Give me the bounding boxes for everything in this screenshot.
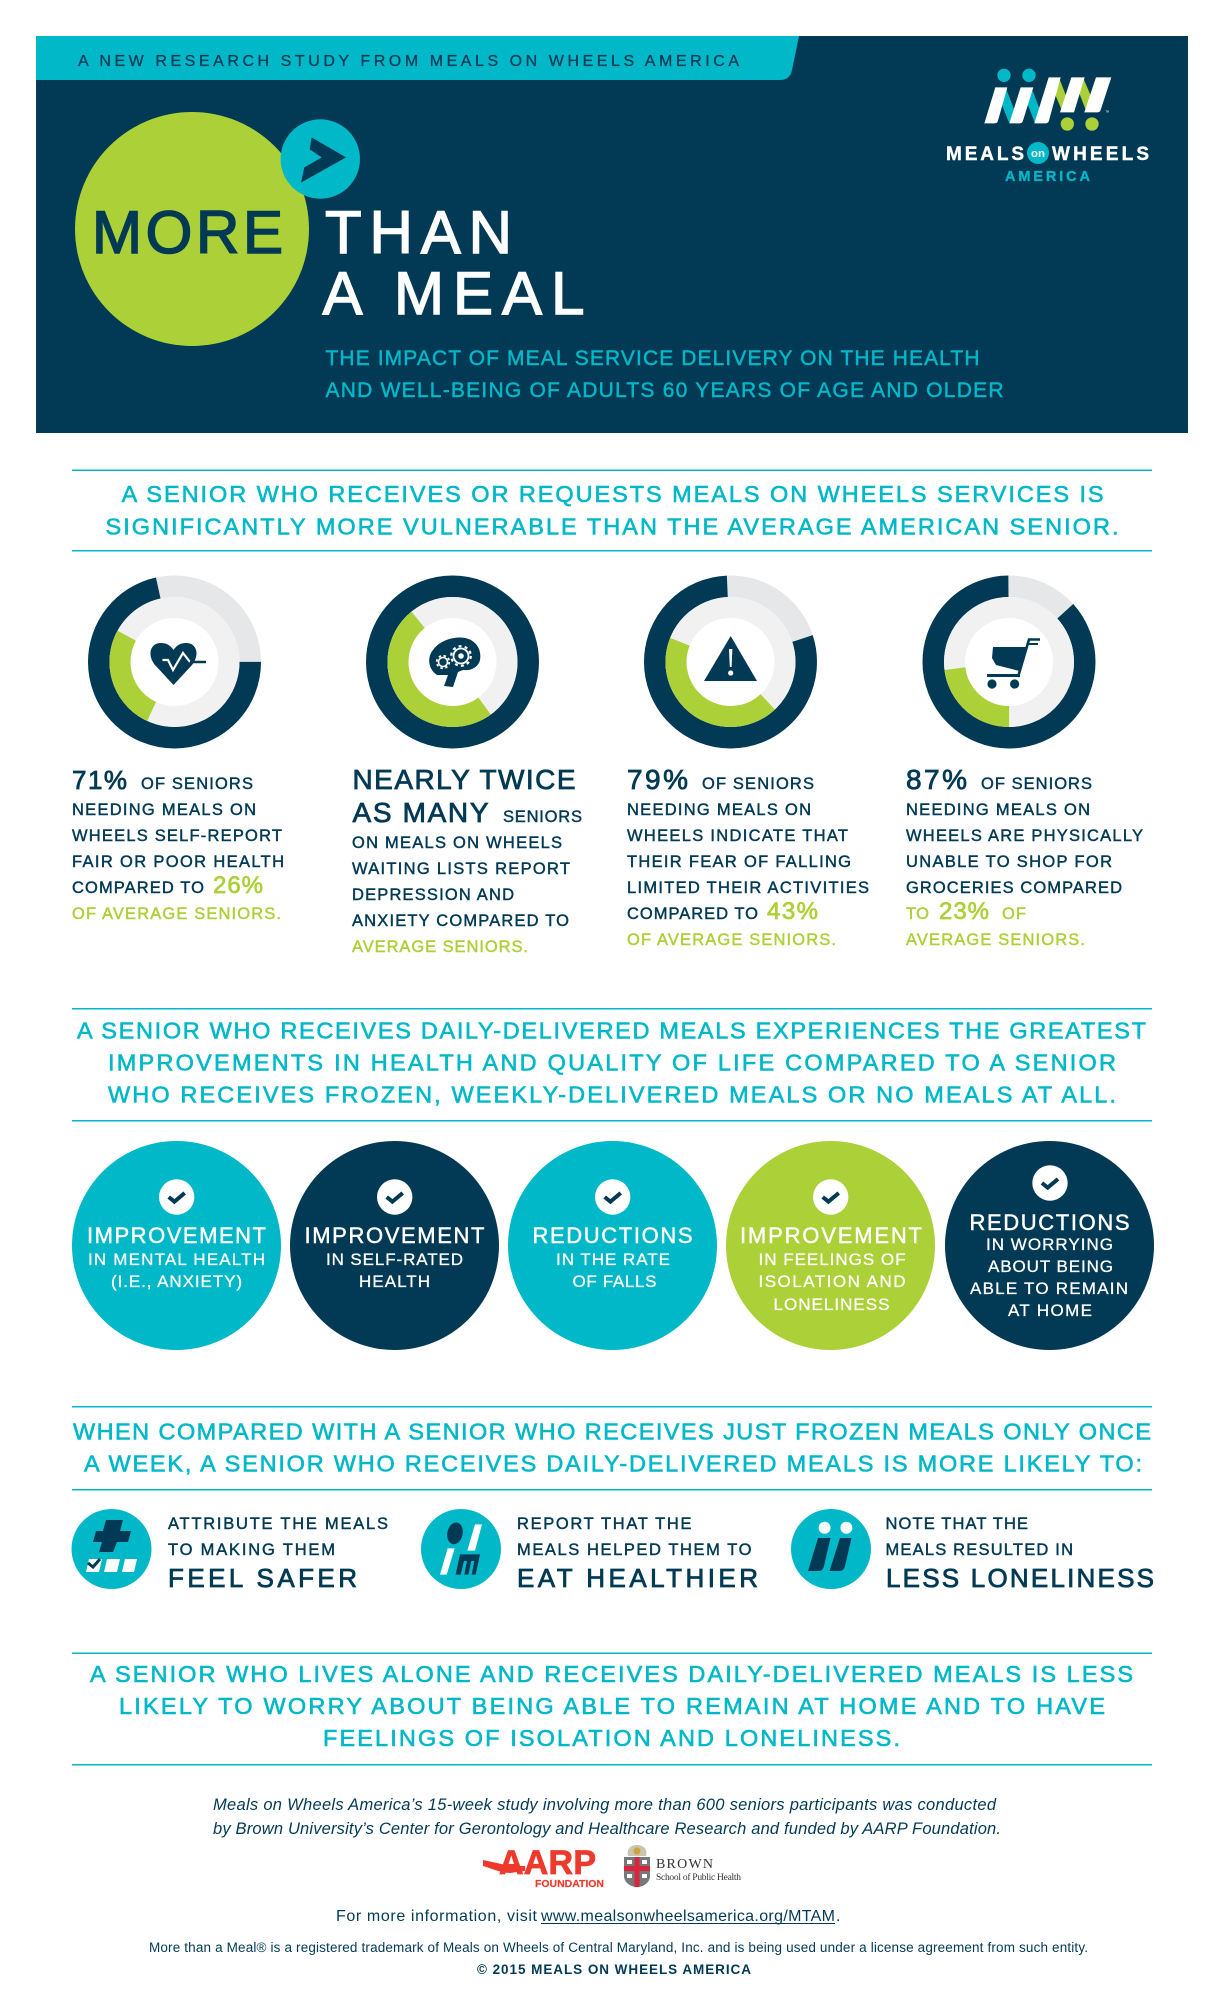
circle: improvement in feelings of isolation: ISOLATION AND bbox=[758, 1272, 906, 1291]
text: less loneliness: MEALS RESULTED IN bbox=[886, 1541, 1073, 1559]
text: 79 percent: OF AVERAGE SENIORS. bbox=[627, 931, 836, 949]
icon: teal arrow badge bbox=[281, 119, 360, 199]
text: 87 percent: UNABLE TO SHOP FOR bbox=[906, 853, 1112, 871]
text: 71 percent: NEEDING MEALS ON bbox=[72, 801, 256, 819]
text: more information: For more information, visit bbox=[336, 1908, 538, 1925]
circle: improvement in feelings of isolation: IMPROVEMENT bbox=[740, 1223, 922, 1248]
text: eat healthier bbox=[517, 1515, 758, 1593]
logo: meals on wheels america: TM bbox=[1105, 109, 1109, 113]
subtitle: AND WELL-BEING OF ADULTS 60 YEARS OF AGE AND OLDER bbox=[326, 379, 1004, 402]
text: feel safer bbox=[168, 1515, 388, 1593]
text: feel safer: FEEL SAFER bbox=[168, 1563, 357, 1593]
heading: lives alone: LIKELY TO WORRY ABOUT BEING ABLE TO REMAIN AT HOME AND TO HAVE bbox=[119, 1693, 1105, 1719]
text: nearly twice as many: DEPRESSION AND bbox=[352, 886, 514, 904]
circle: reductions in worrying: ABOUT BEING bbox=[988, 1257, 1113, 1276]
text: 71 percent: OF SENIORS bbox=[141, 775, 253, 793]
item: eat healthier bbox=[421, 1509, 758, 1593]
logo: meals on wheels america: on bbox=[1031, 148, 1045, 160]
text: feel safer: TO MAKING THEM bbox=[168, 1541, 335, 1559]
icon: medical cross and checkboxes bbox=[72, 1509, 152, 1589]
text: 87 percent: NEEDING MEALS ON bbox=[906, 801, 1090, 819]
text: 71 percent: 26% bbox=[213, 872, 263, 899]
circle: improvement in mental health bbox=[72, 1141, 281, 1350]
circle: improvement in self-rated health: IMPROVEMENT bbox=[304, 1223, 484, 1248]
icon: warning triangle bbox=[704, 636, 757, 681]
logo: AARP Foundation: FOUNDATION bbox=[535, 1878, 604, 1890]
panel: stat nearly twice bbox=[352, 586, 582, 956]
logo: meals on wheels america bbox=[946, 69, 1149, 185]
text: 79 percent: 79% bbox=[627, 764, 688, 795]
heading: compared with frozen meals: WHEN COMPARED WITH A SENIOR WHO RECEIVES JUST FROZEN MEALS ONLY ONCE bbox=[73, 1418, 1151, 1444]
text: nearly twice as many: NEARLY TWICE bbox=[352, 764, 576, 795]
heading: lives alone: FEELINGS OF ISOLATION AND LONELINESS. bbox=[323, 1725, 900, 1751]
text: nearly twice as many: AS MANY bbox=[352, 797, 489, 828]
circle: reductions in worrying bbox=[945, 1141, 1154, 1350]
circle: improvement in self-rated health: IN SELF-RATED bbox=[326, 1250, 463, 1269]
title: more than a meal: A MEAL bbox=[322, 260, 584, 327]
tab: research study ribbon bbox=[36, 36, 799, 80]
text: 79 percent: OF SENIORS bbox=[702, 775, 814, 793]
circle: reductions in worrying: REDUCTIONS bbox=[970, 1210, 1130, 1235]
heading: lives alone: A SENIOR WHO LIVES ALONE AND RECEIVES DAILY-DELIVERED MEALS IS LESS bbox=[90, 1661, 1133, 1687]
text: 87 percent: AVERAGE SENIORS. bbox=[906, 931, 1085, 949]
logo: meals on wheels america: WHEELS bbox=[1052, 144, 1149, 165]
text: nearly twice as many: AVERAGE SENIORS. bbox=[352, 938, 528, 956]
text: more information: . bbox=[836, 1908, 840, 1925]
text: 87 percent bbox=[906, 764, 1143, 949]
text: copyright: © 2015 MEALS ON WHEELS AMERICA bbox=[477, 1962, 751, 1977]
title: more than a meal: MORE bbox=[92, 199, 283, 266]
heading: lives alone bbox=[72, 1652, 1152, 1766]
text: less loneliness: LESS LONELINESS bbox=[886, 1563, 1154, 1593]
icon: brain with gears bbox=[429, 638, 480, 687]
text: 71 percent: WHEELS SELF-REPORT bbox=[72, 827, 282, 845]
text: 71 percent: COMPARED TO bbox=[72, 879, 204, 897]
icon: spoon and fork bbox=[421, 1509, 501, 1589]
icon: heart with pulse bbox=[150, 643, 206, 685]
heading: compared with frozen meals bbox=[72, 1406, 1152, 1490]
heading: daily-delivered meals: WHO RECEIVES FROZEN, WEEKLY-DELIVERED MEALS OR NO MEALS AT ALL. bbox=[108, 1082, 1116, 1108]
text: 71 percent bbox=[72, 765, 284, 923]
text: study description: Meals on Wheels America’s 15-week study involving more than 600 seniors participants was conducted bbox=[213, 1796, 997, 1814]
text: more information: www.mealsonwheelsamerica.org/MTAM bbox=[540, 1908, 835, 1925]
tab: research study ribbon: A NEW RESEARCH STUDY FROM MEALS ON WHEELS AMERICA bbox=[78, 53, 739, 70]
text: 87 percent: 87% bbox=[906, 764, 967, 795]
title: more than a meal bbox=[92, 199, 584, 327]
text: nearly twice as many: SENIORS bbox=[503, 808, 582, 826]
logo: Brown School of Public Health: School of Public Health bbox=[656, 1872, 741, 1883]
panel: stat 79 percent bbox=[627, 586, 869, 949]
text: 71 percent: 71% bbox=[72, 765, 127, 795]
logo: AARP Foundation: AARP bbox=[499, 1844, 596, 1882]
text: nearly twice as many: WAITING LISTS REPORT bbox=[352, 860, 570, 878]
text: less loneliness bbox=[886, 1515, 1154, 1593]
text: eat healthier: REPORT THAT THE bbox=[517, 1515, 692, 1533]
heading: vulnerable seniors: A SENIOR WHO RECEIVES OR REQUESTS MEALS ON WHEELS SERVICES IS bbox=[122, 481, 1104, 507]
circle: improvement in feelings of isolation bbox=[726, 1141, 935, 1350]
text: study description: by Brown University’s Center for Gerontology and Healthcare Research and funded by AARP Foundation. bbox=[213, 1820, 1001, 1838]
item: less loneliness bbox=[791, 1509, 1154, 1593]
circle: reductions in worrying: IN WORRYING bbox=[986, 1235, 1113, 1254]
heading: daily-delivered meals: IMPROVEMENTS IN HEALTH AND QUALITY OF LIFE COMPARED TO A SENIOR bbox=[108, 1050, 1116, 1076]
text: 79 percent: NEEDING MEALS ON bbox=[627, 801, 811, 819]
circle: reductions in the rate of falls: OF FALLS bbox=[572, 1272, 656, 1291]
subtitle: THE IMPACT OF MEAL SERVICE DELIVERY ON THE HEALTH bbox=[326, 347, 980, 370]
logo: Brown School of Public Health bbox=[624, 1845, 741, 1887]
circle: improvement in feelings of isolation: IN FEELINGS OF bbox=[758, 1250, 906, 1269]
circle: improvement in mental health: (I.E., ANXIETY) bbox=[111, 1272, 242, 1291]
text: more information bbox=[336, 1908, 840, 1925]
heading: daily-delivered meals: A SENIOR WHO RECEIVES DAILY-DELIVERED MEALS EXPERIENCES THE GREATEST bbox=[77, 1018, 1146, 1044]
text: 79 percent: WHEELS INDICATE THAT bbox=[627, 827, 848, 845]
circle: reductions in the rate of falls: REDUCTIONS bbox=[532, 1223, 692, 1248]
text: 71 percent: OF AVERAGE SENIORS. bbox=[72, 905, 281, 923]
text: feel safer: ATTRIBUTE THE MEALS bbox=[168, 1515, 388, 1533]
logo: meals on wheels america: AMERICA bbox=[1005, 169, 1091, 185]
text: eat healthier: EAT HEALTHIER bbox=[517, 1563, 758, 1593]
title: more than a meal: THAN bbox=[325, 199, 512, 266]
circle: improvement in feelings of isolation: LONELINESS bbox=[774, 1295, 890, 1314]
text: 71 percent: FAIR OR POOR HEALTH bbox=[72, 853, 284, 871]
text: 87 percent: OF bbox=[1002, 905, 1026, 923]
panel: stat 87 percent bbox=[906, 586, 1143, 949]
text: 79 percent: LIMITED THEIR ACTIVITIES bbox=[627, 879, 869, 897]
icon: green circle bbox=[75, 112, 309, 346]
circle: reductions in the rate of falls bbox=[508, 1141, 717, 1350]
text: nearly twice as many: ANXIETY COMPARED TO bbox=[352, 912, 569, 930]
text: nearly twice as many bbox=[352, 764, 582, 956]
donut chart: depression bbox=[377, 586, 528, 738]
logo: AARP Foundation bbox=[483, 1844, 604, 1890]
donut chart: health bbox=[99, 586, 250, 738]
text: 87 percent: OF SENIORS bbox=[981, 775, 1092, 793]
text: 79 percent: 43% bbox=[767, 898, 818, 925]
text: 87 percent: GROCERIES COMPARED bbox=[906, 879, 1122, 897]
text: 79 percent: COMPARED TO bbox=[627, 905, 758, 923]
panel: header banner bbox=[36, 36, 1188, 433]
circle: improvement in mental health: IN MENTAL HEALTH bbox=[88, 1250, 265, 1269]
donut chart: falling bbox=[655, 586, 806, 738]
text: 79 percent: THEIR FEAR OF FALLING bbox=[627, 853, 851, 871]
icon: two people bbox=[791, 1509, 871, 1589]
donut chart: groceries bbox=[933, 586, 1085, 738]
logo: Brown School of Public Health: BROWN bbox=[656, 1857, 713, 1872]
circle: reductions in worrying: AT HOME bbox=[1008, 1301, 1092, 1320]
text: 87 percent: 23% bbox=[939, 898, 989, 925]
circle: reductions in the rate of falls: IN THE RATE bbox=[556, 1250, 670, 1269]
text: trademark note: More than a Meal® is a registered trademark of Meals on Wheels of Central Maryland, Inc. and is being used under a license agreement from such entity. bbox=[149, 1940, 1088, 1955]
logo: meals on wheels america: MEALS bbox=[946, 144, 1024, 165]
heading: vulnerable seniors bbox=[72, 470, 1152, 552]
circle: improvement in mental health: IMPROVEMENT bbox=[87, 1223, 266, 1248]
item: feel safer bbox=[72, 1509, 388, 1593]
text: eat healthier: MEALS HELPED THEM TO bbox=[517, 1541, 752, 1559]
panel: stat 71 percent bbox=[72, 586, 284, 923]
text: 87 percent: TO bbox=[906, 905, 929, 923]
heading: vulnerable seniors: SIGNIFICANTLY MORE VULNERABLE THAN THE AVERAGE AMERICAN SENIOR. bbox=[106, 514, 1119, 540]
subtitle bbox=[326, 347, 1004, 402]
circle: improvement in self-rated health bbox=[290, 1141, 499, 1350]
text: 87 percent: WHEELS ARE PHYSICALLY bbox=[906, 827, 1143, 845]
heading: compared with frozen meals: A WEEK, A SENIOR WHO RECEIVES DAILY-DELIVERED MEALS IS MORE LIKELY TO: bbox=[84, 1450, 1142, 1476]
circle: improvement in self-rated health: HEALTH bbox=[359, 1272, 430, 1291]
icon: shopping cart bbox=[987, 640, 1040, 689]
heading: daily-delivered meals bbox=[72, 1008, 1152, 1122]
text: study description bbox=[213, 1796, 1001, 1838]
text: nearly twice as many: ON MEALS ON WHEELS bbox=[352, 834, 562, 852]
circle: reductions in worrying: ABLE TO REMAIN bbox=[970, 1279, 1128, 1298]
text: less loneliness: NOTE THAT THE bbox=[886, 1515, 1028, 1533]
text: 79 percent bbox=[627, 764, 869, 949]
